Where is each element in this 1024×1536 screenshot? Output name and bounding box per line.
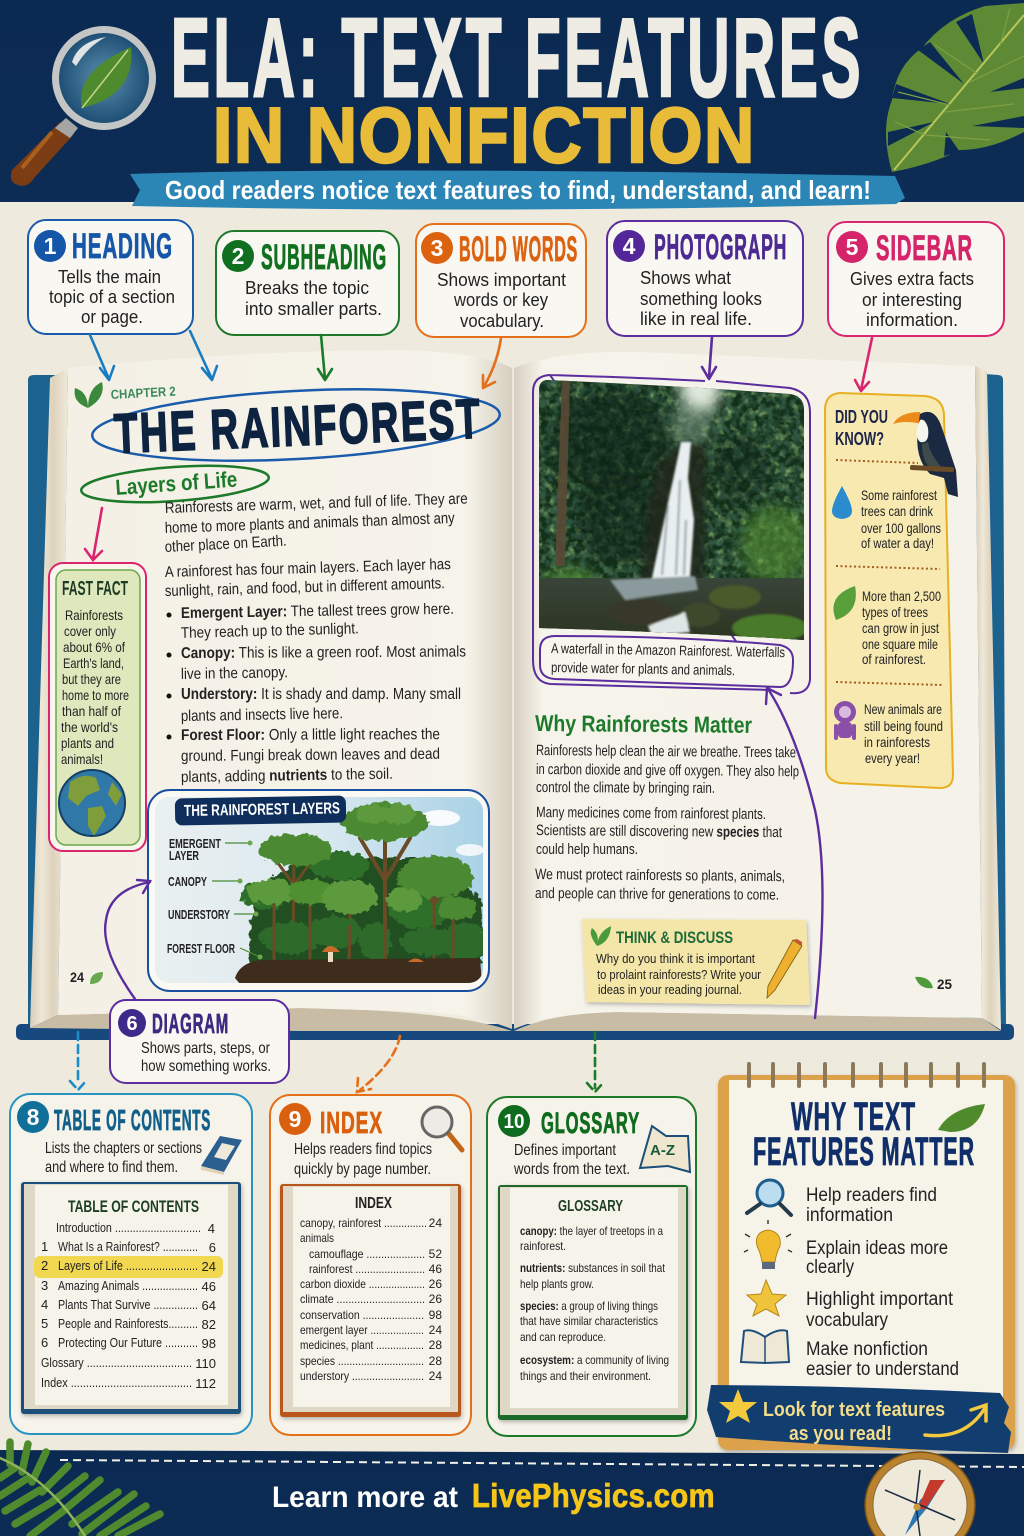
panel: rainforest layers diagram: THE RAINFOREST LAYERS: [184, 800, 340, 820]
callout 2: subheading: SUBHEADING: [261, 238, 387, 277]
callout 4: photograph: [607, 221, 803, 336]
icon: fern: [0, 1442, 160, 1536]
sidebar: fast fact: cover only: [64, 623, 116, 639]
section: why rainforests matter: [535, 710, 799, 904]
fact: water: [861, 487, 941, 551]
left page body text: Emergent Layer: The tallest trees grow here.: [181, 601, 454, 622]
tagline ribbon: [130, 170, 905, 210]
mini book: contents page: 4: [41, 1297, 48, 1312]
sticky note: think and discuss: to prolaint rainforests? Write your: [597, 967, 762, 982]
left page body text: home to more plants and animals than almost any: [165, 510, 455, 537]
footer band: [0, 1450, 1024, 1536]
mini book: index page: camouflage ....................: [309, 1247, 425, 1261]
left page body text: They reach up to the sunlight.: [181, 620, 359, 642]
icon: monstera leaf: [886, 3, 1024, 172]
notebook rings: [749, 1064, 984, 1086]
panel: rainforest layers diagram: [148, 790, 489, 991]
callout 1: heading: HEADING: [72, 227, 173, 266]
sidebar: fast fact: than half of: [62, 703, 121, 719]
arrow: heading right: [190, 331, 217, 380]
section heading: Why Rainforests Matter: [535, 710, 752, 738]
layer labels: LAYER: [169, 849, 199, 863]
fact: trees: one square mile: [862, 636, 938, 652]
callout 1: heading: or page.: [81, 307, 143, 327]
sidebar: fast fact: plants and: [61, 735, 114, 751]
icon: leaf: [938, 1104, 985, 1132]
arrow: bold words: [483, 338, 501, 388]
mini book: contents page: Protecting Our Future ...........: [58, 1335, 198, 1350]
section: why rainforests matter: and people can thrive for generations to come.: [535, 885, 779, 904]
mini book: index page: conservation .....................: [300, 1308, 424, 1322]
sidebar: fast fact: FAST FACT: [62, 578, 128, 600]
reason 4: Make nonfiction: [806, 1339, 928, 1360]
panel 9: index: quickly by page number.: [294, 1161, 431, 1178]
layer labels: [167, 837, 235, 956]
icon: leaf: [833, 586, 856, 620]
trees illustration: [235, 803, 487, 984]
layer labels: UNDERSTORY: [168, 908, 230, 922]
mini book: index page: 98: [429, 1308, 442, 1322]
fact: animals: New animals are: [864, 701, 942, 717]
heading oval: [91, 380, 501, 470]
section: why rainforests matter: control the climate by bringing rain.: [536, 779, 715, 797]
icon: globe: [59, 770, 125, 836]
sidebar: fast fact: home to more: [62, 687, 129, 703]
page heading: THE RAINFOREST: [113, 387, 483, 465]
icon: A-Z book: [640, 1126, 690, 1172]
mini book: index page: canopy, rainforest ...............: [300, 1216, 427, 1230]
layer labels: CANOPY: [168, 875, 207, 889]
mini book: index page: emergent layer ...................: [300, 1323, 424, 1337]
mini book: index page: understory .........................: [300, 1369, 424, 1383]
reason 3: vocabulary: [806, 1310, 888, 1331]
panel 9: index: INDEX: [320, 1105, 383, 1140]
left page body text: Canopy: This is like a green roof. Most animals: [181, 644, 466, 662]
mini book: contents page: Plants That Survive ...............: [58, 1297, 198, 1312]
section: why rainforests matter: Rainforests help clean the air we breathe. Trees take: [536, 742, 796, 761]
mini book: contents page: 3: [41, 1278, 48, 1293]
arrow: photograph callout to caption: [766, 688, 822, 1018]
callout 6: diagram: Shows parts, steps, or: [141, 1040, 271, 1057]
fact: trees: of rainforest.: [862, 651, 926, 667]
footer link: LivePhysics.com: [472, 1477, 715, 1514]
panel 8: table of contents: [10, 1094, 252, 1434]
fact: animals: [864, 701, 943, 766]
arrow: diagram callout to diagram: [105, 880, 150, 999]
fact: water: Some rainforest: [861, 487, 937, 503]
footer link: [272, 1477, 715, 1514]
right page edges: [975, 366, 1001, 1030]
left page body text: plants and insects live here.: [181, 705, 343, 725]
callout 4: photograph: like in real life.: [640, 309, 752, 329]
callout 4: photograph: PHOTOGRAPH: [654, 228, 787, 267]
mini book: index page: 28: [429, 1354, 442, 1368]
callout 1: heading: [28, 220, 193, 334]
fact: animals: every year!: [865, 750, 920, 766]
section: why rainforests matter: We must protect rainforests so plants, animals,: [535, 866, 785, 885]
fact: trees: More than 2,500: [862, 588, 941, 604]
callout 6: diagram: DIAGRAM: [152, 1008, 229, 1039]
left page body text: sunlight, rain, and food, but in different amounts.: [165, 575, 445, 600]
mini book: glossary page: and can reproduce.: [520, 1330, 606, 1344]
panel: why text features matter notebook: [707, 1064, 1015, 1453]
callout 3: bold words: 3: [431, 235, 443, 261]
sidebar: did you know: DID YOU: [835, 407, 888, 427]
mini book: contents page: Index ........................................: [41, 1375, 192, 1390]
diagram title pill: [175, 796, 346, 825]
mini book: index page: rainforest ........................: [309, 1262, 425, 1276]
panel 8: table of contents: TABLE OF CONTENTS: [54, 1105, 211, 1137]
mini book: contents page: 6: [209, 1240, 216, 1255]
mini book: index page: 24: [429, 1369, 442, 1383]
reason 1: information: [806, 1205, 893, 1226]
mini book: contents page: 64: [202, 1298, 216, 1313]
mini book: index page: 24: [429, 1216, 442, 1230]
callout 5: sidebar: [828, 222, 1004, 336]
mini book: contents page: 2: [41, 1258, 48, 1273]
layer labels: FOREST FLOOR: [167, 942, 235, 956]
panel 8: table of contents: Lists the chapters or sections: [45, 1140, 202, 1157]
icon: magnifier: [422, 1107, 462, 1150]
mini book: contents page: 6: [41, 1335, 48, 1350]
highlight row: [34, 1256, 223, 1278]
subheading text: Layers of Life: [115, 467, 238, 500]
mini book: glossary page: ecosystem: a community of living: [520, 1353, 669, 1367]
mini book: index page: [280, 1184, 461, 1417]
page number 25: 25: [937, 976, 952, 992]
mini book: glossary page: rainforest.: [520, 1239, 566, 1253]
mini book: index page: 24: [429, 1323, 442, 1337]
reason 4: [741, 1330, 959, 1380]
arrow: sidebar: [855, 338, 872, 391]
photo caption: [540, 636, 793, 687]
reason 2: clearly: [806, 1257, 854, 1278]
sticky note: think and discuss: [582, 919, 810, 1005]
mini book: contents page: What Is a Rainforest? ............: [58, 1239, 198, 1254]
mushrooms: [322, 946, 424, 962]
mini book: contents page: People and Rainforests..........: [58, 1316, 198, 1331]
footer link: Learn more at: [272, 1481, 458, 1514]
section: why rainforests matter: could help humans.: [536, 841, 638, 858]
mini book: glossary page: nutrients: substances in soil that: [520, 1261, 666, 1275]
callout 6: diagram: [110, 1000, 289, 1083]
mini book: index page: 46: [429, 1262, 442, 1276]
open book: [16, 350, 1014, 1040]
mini book: glossary page: canopy: the layer of treetops in a: [520, 1224, 663, 1238]
callout 2: subheading: into smaller parts.: [245, 299, 382, 319]
panel 10: glossary: Defines important: [514, 1142, 616, 1159]
callout 5: sidebar: 5: [846, 234, 859, 260]
section: why rainforests matter: in carbon dioxide and give off oxygen. They also help: [536, 761, 799, 780]
photo frame: [533, 375, 810, 693]
mini book: index page: 26: [429, 1277, 442, 1291]
mini book: glossary page: species: a group of living things: [520, 1299, 658, 1313]
mini book: index page: medicines, plant .................: [300, 1338, 424, 1352]
mini book: index page: climate ..............................: [300, 1292, 425, 1306]
icon: A-Z book: A-Z: [650, 1142, 675, 1159]
right page: [514, 352, 982, 1029]
callout 5: sidebar: or interesting: [862, 290, 962, 310]
mini book: contents page: [21, 1182, 241, 1414]
callout 3: bold words: vocabulary.: [460, 311, 544, 331]
mini book: glossary page: that have similar characteristics: [520, 1314, 658, 1328]
callout 6: diagram: how something works.: [141, 1058, 271, 1075]
text: BOLD WORDS: [459, 230, 578, 269]
mini book: contents page: 46: [202, 1279, 216, 1294]
left page body text: live in the canopy.: [181, 664, 288, 683]
sticky note: think and discuss: ideas in your reading journal.: [598, 982, 742, 997]
mini book: contents page: 110: [195, 1356, 216, 1371]
callout 1: heading: Tells the main: [58, 267, 161, 287]
left page heading group: [75, 380, 501, 508]
left page body text: A rainforest has four main layers. Each layer has: [165, 556, 451, 581]
callout 5: sidebar: information.: [866, 310, 958, 330]
arrow: subheading: [318, 335, 332, 380]
banner: look for text features: Look for text features: [763, 1399, 945, 1421]
banner: look for text features: as you read!: [789, 1423, 892, 1445]
fact: animals: still being found: [864, 718, 943, 734]
photograph with frame: [533, 362, 826, 693]
sidebar: fast fact: but they are: [62, 671, 121, 687]
callout 2: subheading: [216, 231, 399, 335]
callout 3: bold words: Shows important: [437, 270, 566, 290]
sticky note: think and discuss: THINK & DISCUSS: [616, 929, 733, 947]
mini book: contents page: 4: [208, 1221, 215, 1236]
callout 4: photograph: 4: [623, 233, 636, 259]
tagline ribbon: Good readers notice text features to find, understand, and learn!: [165, 175, 871, 205]
left page: [58, 350, 512, 1029]
callout 3: bold words: words or key: [453, 290, 548, 310]
fact: water: trees can drink: [861, 503, 934, 519]
reason 4: easier to understand: [806, 1359, 959, 1380]
panel 9: index: 9: [289, 1106, 301, 1132]
mini book: index page: carbon dioxide ....................: [300, 1277, 425, 1291]
sidebar: did you know: [825, 393, 958, 788]
title line two: IN NONFICTION: [213, 91, 756, 179]
reason 1: [747, 1180, 937, 1226]
left page body text: plants, adding nutrients to the soil.: [181, 766, 393, 786]
icon: water drop: [832, 486, 852, 519]
sidebar: fast fact: [49, 563, 146, 851]
panel 10: glossary: [487, 1097, 696, 1436]
reason 3: Highlight important: [806, 1289, 954, 1310]
chapter label: CHAPTER 2: [110, 384, 176, 402]
icon: blue book: [201, 1136, 242, 1175]
book cover: [28, 372, 1006, 1030]
sidebar: did you know: KNOW?: [835, 429, 884, 449]
icon: monkey: [834, 701, 856, 740]
waterfall photo: [539, 380, 804, 640]
arrow: heading left: [90, 335, 114, 380]
mini book: contents page: 82: [202, 1317, 216, 1332]
reason 2: [744, 1220, 948, 1278]
reason 1: Help readers find: [806, 1185, 937, 1206]
mini book: glossary page: GLOSSARY: [558, 1198, 623, 1215]
page number 24: 24: [70, 969, 84, 985]
mini book: glossary page: help plants grow.: [520, 1277, 594, 1291]
mini book: contents page: 98: [202, 1336, 216, 1351]
left page body text: Understory: It is shady and damp. Many small: [181, 686, 461, 703]
page number 25: [915, 976, 952, 992]
left page body text: other place on Earth.: [164, 533, 287, 556]
mini book: index page: species ..............................: [300, 1354, 424, 1368]
icon: magnifying glass with leaf: [11, 26, 156, 186]
left page body text: [164, 490, 468, 786]
sidebar: fast fact: the world's: [61, 719, 118, 735]
mini book: index page: 52: [429, 1247, 442, 1261]
callout 4: photograph: Shows what: [640, 268, 731, 288]
callout 4: photograph: something looks: [640, 289, 762, 309]
fact: trees: [862, 588, 941, 667]
mini book: contents page: Amazing Animals ...................: [58, 1278, 198, 1293]
sticky note: think and discuss: Why do you think it is important: [596, 951, 755, 966]
mini book: contents page: 1: [41, 1239, 48, 1254]
header band: [0, 0, 1024, 202]
reason 3: [747, 1280, 954, 1331]
reason 2: Explain ideas more: [806, 1238, 948, 1259]
mini book: contents page: Introduction .............................: [56, 1220, 201, 1235]
mini book: contents page: 5: [41, 1316, 48, 1331]
mini book: contents page: 112: [195, 1376, 216, 1391]
sidebar: fast fact: Earth's land,: [63, 655, 124, 671]
arrow: to glossary: [587, 1032, 603, 1092]
arrow: to table of contents: [70, 1032, 86, 1090]
callout 6: diagram: 6: [126, 1013, 138, 1035]
panel 9: index: Helps readers find topics: [294, 1141, 432, 1158]
mini book: contents page: Glossary ...................................: [41, 1355, 192, 1370]
panel 9: index: [270, 1095, 471, 1435]
section: why rainforests matter: Scientists are still discovering new species that: [536, 822, 783, 841]
left page body text: Rainforests are warm, wet, and full of life. They are: [165, 490, 468, 517]
arrows from top callouts to book: [90, 331, 872, 391]
mini book: contents page: TABLE OF CONTENTS: [68, 1197, 199, 1216]
section: why rainforests matter: Many medicines come from rainforest plants.: [536, 804, 766, 823]
arrow: photograph: [702, 337, 716, 379]
panel 8: table of contents: and where to find them.: [45, 1159, 178, 1176]
callout 1: heading: 1: [44, 233, 57, 259]
left page edges: [30, 368, 68, 1028]
mini book: index page: animals: [300, 1231, 334, 1245]
sidebar: fast fact: about 6% of: [63, 639, 125, 655]
mini book: contents page: 24: [202, 1259, 216, 1274]
banner: look for text features: [707, 1385, 1011, 1453]
left page body text: Forest Floor: Only a little light reaches the: [181, 726, 440, 744]
mini book: index page: INDEX: [355, 1195, 392, 1212]
sidebar: fast fact: animals!: [61, 751, 103, 767]
left page body text: ground. Fungi break down leaves and dead: [181, 746, 440, 765]
icon: compass: [865, 1452, 975, 1536]
panel 10: glossary: words from the text.: [513, 1161, 630, 1178]
icon: pencil: [767, 939, 802, 998]
icon: toucan: [893, 412, 958, 497]
dashed arrows from book to reference panels: [70, 1032, 603, 1092]
mini book: index page: 28: [429, 1338, 442, 1352]
callout 2: subheading: Breaks the topic: [245, 278, 369, 298]
mini book: index page: 26: [429, 1292, 442, 1306]
sidebar: fast fact: Rainforests: [65, 607, 123, 623]
photo caption: A waterfall in the Amazon Rainforest. Waterfalls: [551, 640, 785, 660]
callout 2: subheading: 2: [232, 243, 244, 269]
arrow: to index: [357, 1036, 400, 1092]
mini book: contents page: Layers of Life ........................: [58, 1258, 198, 1273]
page number 24: [70, 969, 103, 985]
panel 8: table of contents: 8: [27, 1104, 40, 1130]
fact: water: over 100 gallons: [861, 520, 941, 536]
arrow: subheading to fast fact: [85, 508, 102, 560]
panel 10: glossary: 10: [504, 1111, 524, 1133]
photo caption: provide water for plants and animals.: [551, 659, 735, 678]
mini book: glossary page: things and their environment.: [520, 1369, 651, 1383]
fact: animals: in rainforests: [864, 734, 930, 750]
notebook title: WHY TEXT: [791, 1095, 916, 1139]
fact: trees: types of trees: [862, 604, 928, 620]
subheading oval: [80, 460, 270, 508]
fact: water: of water a day!: [861, 535, 934, 551]
layer labels: EMERGENT: [169, 837, 221, 851]
callout 5: sidebar: Gives extra facts: [850, 269, 974, 289]
callout 3: bold words: [416, 224, 586, 337]
icon: chapter leaves: [75, 382, 103, 408]
fact: trees: can grow in just: [862, 620, 939, 636]
callout 1: heading: topic of a section: [49, 287, 175, 307]
panel 10: glossary: GLOSSARY: [541, 1107, 640, 1140]
mini book: glossary page: [498, 1185, 688, 1420]
